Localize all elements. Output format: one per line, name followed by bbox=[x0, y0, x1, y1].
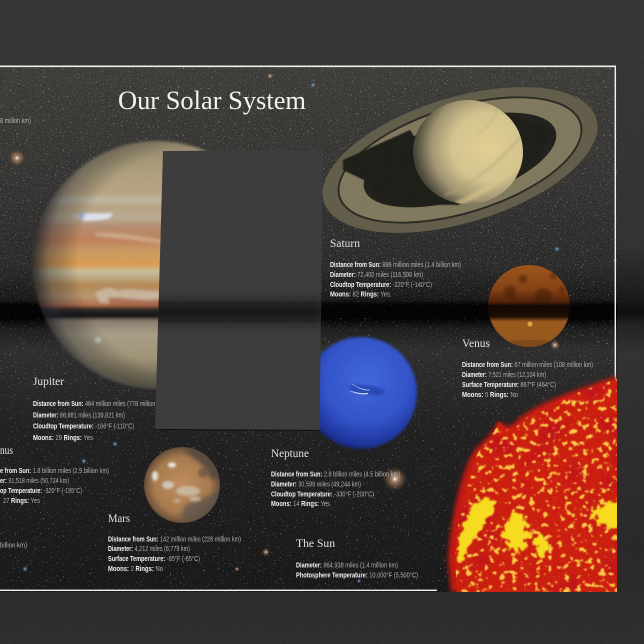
coloured background stars bbox=[9, 73, 560, 584]
text block: Neptune: Distance from Sun: 2.8 billion miles (4.5 billion km) bbox=[271, 470, 400, 478]
panel: poster sheet bbox=[0, 67, 617, 592]
planet: Saturn bbox=[322, 87, 598, 233]
text block: Mars bbox=[108, 513, 241, 573]
text block: Venus: Diameter: 7,521 miles (12,104 km) bbox=[462, 370, 546, 379]
text block: Saturn: Distance from Sun: 886 million miles (1.4 billion km) bbox=[330, 260, 461, 269]
white border frame bbox=[0, 66, 616, 591]
text block: The Sun bbox=[296, 538, 418, 580]
text block: Mars: Mars bbox=[108, 513, 130, 525]
text block: Uranus (cropped): op Temperature: -320°F (-195°C) bbox=[0, 486, 82, 495]
title: Our Solar System bbox=[118, 86, 306, 115]
text block: Mars: Surface Temperature: -85°F (-65°C) bbox=[108, 554, 200, 563]
text block: Neptune: Cloudtop Temperature: -330°F (-200°C) bbox=[271, 490, 374, 498]
planet: Venus bbox=[488, 265, 570, 354]
white storm on Jupiter bbox=[75, 213, 165, 343]
text block: Saturn: Cloudtop Temperature: -220°F (-140°C) bbox=[330, 280, 432, 289]
Saturn rings bbox=[305, 58, 615, 262]
planet: Mars bbox=[144, 447, 222, 523]
text block: Jupiter overflow: 8 million km) bbox=[0, 116, 31, 125]
text block: Venus bbox=[462, 338, 593, 399]
text block: Jupiter: Distance from Sun: 484 million miles (778 million km) bbox=[33, 399, 166, 408]
planet: the Sun bbox=[440, 370, 620, 595]
text block: Saturn: Saturn bbox=[330, 238, 360, 250]
text block: Jupiter bbox=[33, 376, 166, 442]
text block: Uranus (cropped): 27 Rings: Yes bbox=[3, 496, 40, 505]
text block: The Sun: Photosphere Temperature: 10,000°F (5,500°C) bbox=[296, 570, 418, 580]
text block: Neptune bbox=[271, 448, 400, 508]
text block: Uranus (cropped): billion km) bbox=[0, 540, 27, 550]
planet: Neptune bbox=[305, 337, 417, 449]
text block: The Sun: The Sun bbox=[296, 538, 335, 550]
Sun bright active regions bbox=[456, 499, 620, 562]
text block: Neptune: Moons: 14 Rings: Yes bbox=[271, 499, 330, 508]
text block: Saturn: Moons: 82 Rings: Yes bbox=[330, 290, 390, 298]
text block: Mars: Moons: 2 Rings: No bbox=[108, 564, 163, 573]
text block: Uranus (cropped): nus bbox=[0, 445, 13, 457]
text block: Jupiter: Moons: 29 Rings: Yes bbox=[33, 433, 93, 442]
text block: Venus: Surface Temperature: 867°F (464°C) bbox=[462, 380, 556, 389]
planet: Jupiter bbox=[32, 140, 208, 390]
text block: Jupiter: Jupiter bbox=[33, 376, 64, 388]
text block: Saturn: Diameter: 72,400 miles (116,500 km) bbox=[330, 270, 423, 279]
text block: Jupiter: Cloudtop Temperature: -166°F (-110°C) bbox=[33, 422, 134, 430]
text block: Saturn bbox=[330, 238, 461, 298]
folded paper panel covering the poster bbox=[150, 150, 325, 431]
text block: The Sun: Diameter: 864,938 miles (1.4 million km) bbox=[296, 560, 398, 570]
text block: Uranus (cropped): er: 31,518 miles (50,724 km) bbox=[0, 476, 69, 485]
text block: Mars: Diameter: 4,212 miles (6,779 km) bbox=[108, 544, 190, 553]
text block: Venus: Venus bbox=[462, 338, 491, 350]
text block: Neptune: Diameter: 30,599 miles (49,244 km) bbox=[271, 480, 361, 488]
text block: Neptune: Neptune bbox=[271, 448, 309, 460]
Saturn globe bbox=[413, 100, 523, 204]
Saturn shadow bbox=[342, 112, 506, 206]
text block: Jupiter: Diameter: 86,881 miles (139,821 km) bbox=[33, 410, 125, 420]
text block: Mars: Distance from Sun: 142 million miles (228 million km) bbox=[108, 534, 241, 544]
text block: Uranus (cropped) bbox=[0, 445, 109, 550]
text block: Venus: Distance from Sun: 67 million miles (108 million km) bbox=[462, 360, 593, 369]
text block: Uranus (cropped): e from Sun: 1.8 billion miles (2.9 billion km) bbox=[0, 466, 109, 475]
text block: Venus: Moons: 0 Rings: No bbox=[462, 390, 518, 399]
